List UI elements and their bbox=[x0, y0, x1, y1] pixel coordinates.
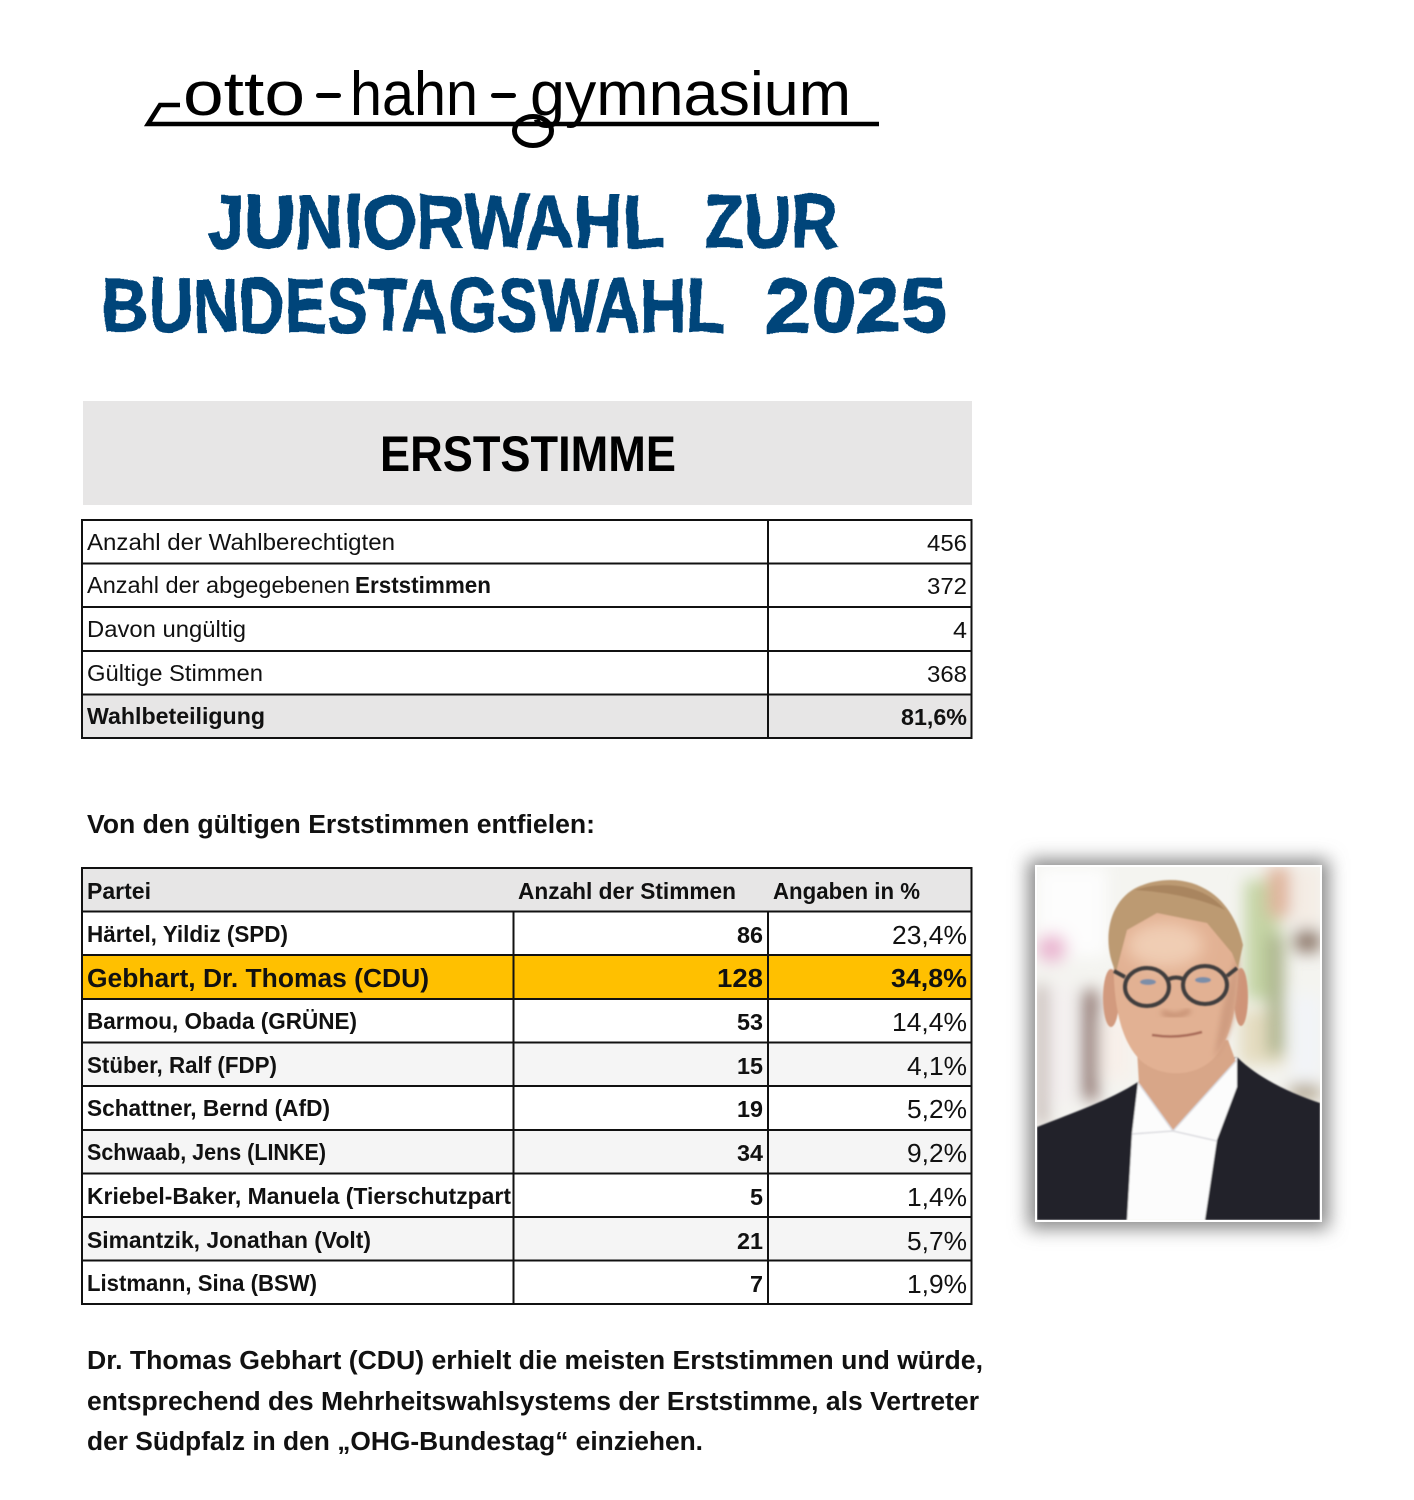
row: Volt bbox=[87, 1227, 967, 1256]
row: LINKE bbox=[87, 1139, 967, 1168]
row: CDU winner bbox=[87, 965, 967, 993]
row: abgegebene Erststimmen bbox=[87, 572, 967, 599]
subheading: Von den gültigen Erststimmen entfielen: bbox=[87, 811, 595, 839]
row: gültige Stimmen: Gültige Stimmen bbox=[87, 660, 263, 686]
row: LINKE: 34 bbox=[737, 1140, 763, 1166]
row: ungültig: Davon ungültig bbox=[87, 616, 246, 642]
row: BSW: 7 bbox=[750, 1271, 763, 1297]
title: ZUR bbox=[704, 180, 838, 265]
row: gültige Stimmen bbox=[87, 660, 967, 687]
row: FDP: 4,1% bbox=[907, 1053, 967, 1081]
row: GRÜNE bbox=[87, 1008, 967, 1037]
header row bbox=[87, 878, 920, 904]
row: SPD: Härtel, Yildiz (SPD) bbox=[87, 921, 288, 947]
collar shadows bbox=[1132, 1060, 1237, 1141]
row: Wahlberechtigte bbox=[87, 529, 967, 556]
row: SPD: 23,4% bbox=[892, 922, 967, 950]
row: GRÜNE: 14,4% bbox=[892, 1009, 967, 1037]
row: AfD: Schattner, Bernd (AfD) bbox=[87, 1095, 330, 1121]
table: votes by candidate bbox=[82, 868, 972, 1304]
row: AfD: 19 bbox=[737, 1096, 763, 1122]
header row: Angaben in % bbox=[773, 878, 920, 904]
nose bbox=[1162, 1010, 1190, 1016]
row: Wahlbeteiligung: 81,6% bbox=[901, 704, 967, 730]
row: SPD bbox=[87, 921, 967, 950]
row: Volt: Simantzik, Jonathan (Volt) bbox=[87, 1227, 371, 1253]
row: CDU winner: Gebhart, Dr. Thomas (CDU) bbox=[87, 965, 429, 993]
row: ungültig: 4 bbox=[953, 617, 967, 643]
mouth bbox=[1152, 1032, 1202, 1036]
header row: Partei bbox=[87, 878, 151, 904]
row: BSW bbox=[87, 1270, 967, 1299]
row: Tierschutzpartei: Kriebel-Baker, Manuela (Tierschutzpart bbox=[87, 1183, 511, 1209]
title bbox=[102, 180, 947, 349]
row: FDP bbox=[87, 1052, 967, 1081]
row: AfD bbox=[87, 1095, 967, 1124]
row: abgegebene Erststimmen: Anzahl der abgegebenen bbox=[87, 572, 350, 598]
logo: otto-hahn-gymnasium: hahn bbox=[350, 60, 478, 129]
row: CDU winner: 34,8% bbox=[891, 965, 967, 993]
shirt bbox=[1127, 1057, 1237, 1220]
row: GRÜNE: 53 bbox=[737, 1009, 763, 1035]
row: BSW: 1,9% bbox=[907, 1271, 967, 1299]
conclusion text: Dr. Thomas Gebhart (CDU) erhielt die meisten Erststimmen und würde, bbox=[87, 1347, 983, 1375]
row: FDP: Stüber, Ralf (FDP) bbox=[87, 1052, 277, 1078]
row: Wahlbeteiligung: Wahlbeteiligung bbox=[87, 703, 265, 729]
row: Tierschutzpartei: 1,4% bbox=[907, 1184, 967, 1212]
row: BSW: Listmann, Sina (BSW) bbox=[87, 1270, 317, 1296]
face bbox=[1114, 910, 1238, 1073]
logo: otto-hahn-gymnasium: gymnasium bbox=[530, 60, 851, 129]
row: abgegebene Erststimmen: 372 bbox=[927, 573, 967, 599]
row: Wahlbeteiligung bbox=[87, 703, 967, 730]
row: SPD: 86 bbox=[737, 922, 763, 948]
suit bbox=[1037, 1057, 1320, 1220]
row: gültige Stimmen: 368 bbox=[927, 661, 967, 687]
title: BUNDESTAGSWAHL bbox=[102, 264, 725, 349]
hair bbox=[1108, 880, 1243, 972]
row: FDP: 15 bbox=[737, 1053, 763, 1079]
row: abgegebene Erststimmen: Erststimmen bbox=[355, 572, 491, 598]
portrait photo bbox=[1028, 859, 1329, 1229]
table: turnout summary bbox=[82, 520, 972, 738]
row: ungültig bbox=[87, 616, 967, 643]
row: Wahlberechtigte: 456 bbox=[927, 530, 967, 556]
row: AfD: 5,2% bbox=[907, 1096, 967, 1124]
conclusion text: entsprechend des Mehrheitswahlsystems der Erststimme, als Vertreter bbox=[87, 1388, 979, 1416]
row: LINKE: 9,2% bbox=[907, 1140, 967, 1168]
row: Tierschutzpartei: 5 bbox=[750, 1184, 763, 1210]
row: Volt: 5,7% bbox=[907, 1228, 967, 1256]
title: JUNIORWAHL bbox=[207, 180, 665, 265]
row: GRÜNE: Barmou, Obada (GRÜNE) bbox=[87, 1008, 357, 1034]
row: Volt: 21 bbox=[737, 1228, 763, 1254]
glasses bbox=[1114, 966, 1237, 1006]
section heading: Erststimme bbox=[83, 401, 972, 505]
row: CDU winner: 128 bbox=[717, 965, 763, 993]
header row: Anzahl der Stimmen bbox=[518, 878, 736, 904]
row: Wahlberechtigte: Anzahl der Wahlberechtigten bbox=[87, 529, 395, 555]
section heading: Erststimme: ERSTSTIMME bbox=[380, 426, 676, 482]
eyes bbox=[1140, 979, 1156, 985]
logo: otto-hahn-gymnasium: otto bbox=[183, 60, 305, 129]
row: Tierschutzpartei bbox=[87, 1183, 967, 1212]
conclusion text bbox=[87, 1347, 983, 1456]
conclusion text: der Südpfalz in den „OHG-Bundestag“ einziehen. bbox=[87, 1428, 703, 1456]
title: 2025 bbox=[765, 264, 947, 349]
row: LINKE: Schwaab, Jens (LINKE) bbox=[87, 1139, 326, 1165]
ears bbox=[1103, 969, 1119, 1027]
neck bbox=[1137, 1040, 1236, 1131]
logo: otto-hahn-gymnasium bbox=[148, 60, 879, 146]
